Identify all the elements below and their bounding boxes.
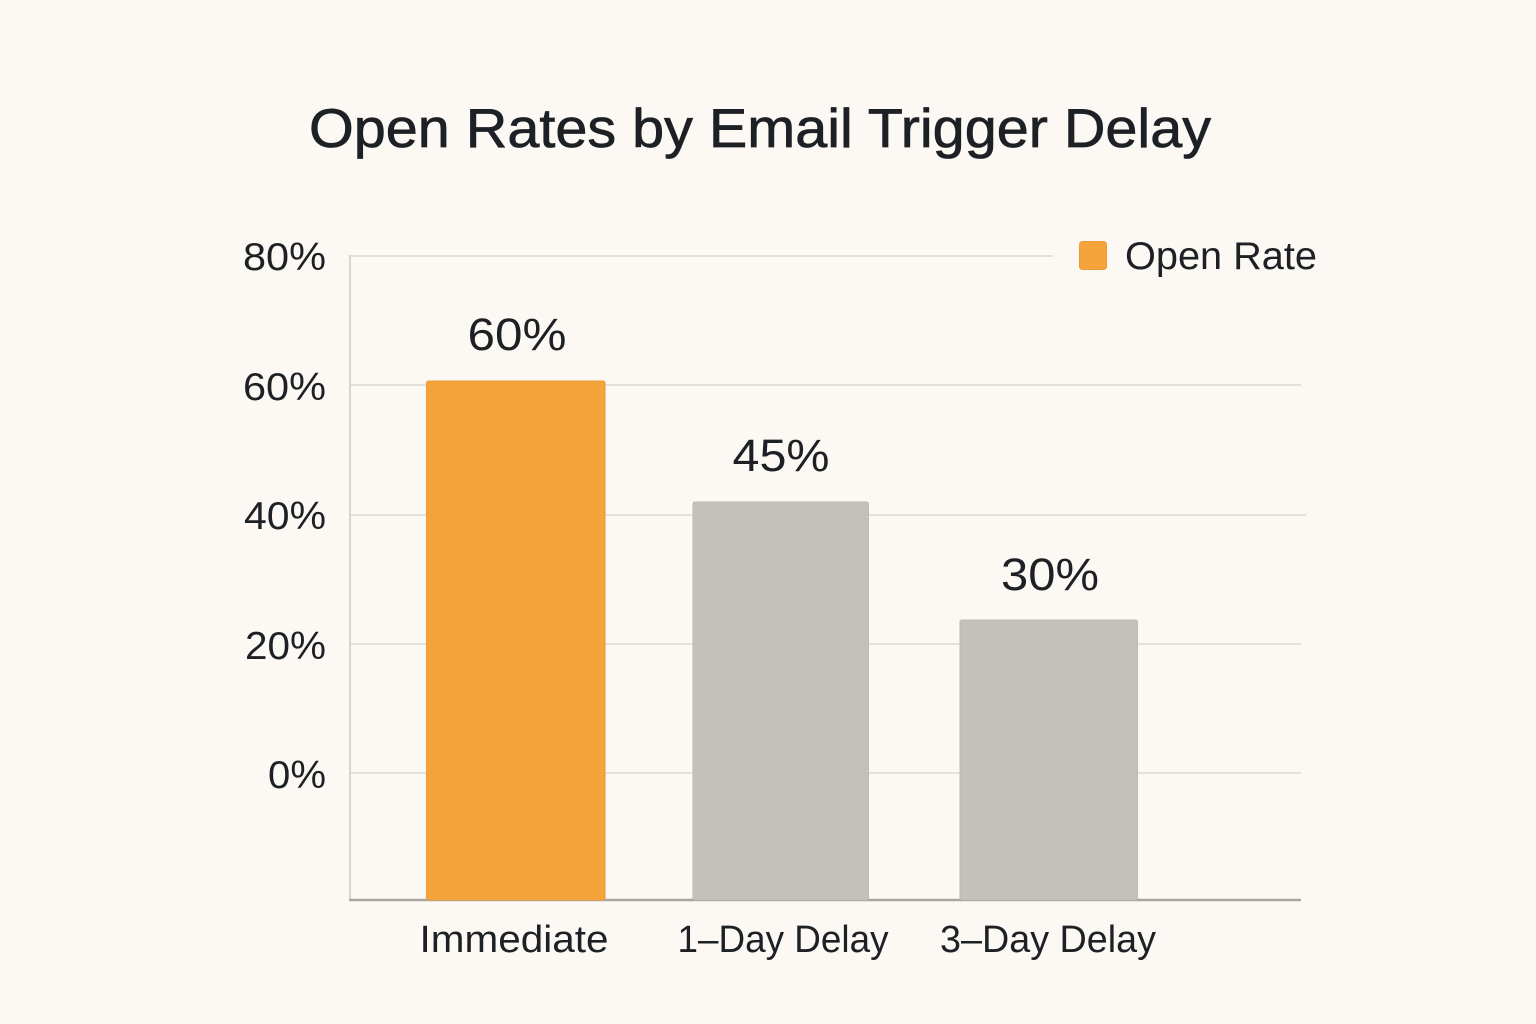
bar: 3-Day Delay 30% <box>960 549 1138 900</box>
legend swatch <box>1080 242 1106 270</box>
bar: Immediate 60% <box>426 309 605 900</box>
x axis labels: 1–Day Delay <box>678 919 888 961</box>
legend <box>1080 235 1317 278</box>
bar: Immediate 60%: 60% <box>468 309 566 360</box>
title: Open Rates by Email Trigger Delay <box>309 97 1212 159</box>
y axis labels <box>243 236 326 797</box>
x axis labels <box>420 919 1156 961</box>
y axis labels: 40% <box>244 495 326 538</box>
y axis labels: 80% <box>243 236 326 279</box>
bar: 3-Day Delay 30%: 30% <box>1001 549 1099 600</box>
y axis labels: 0% <box>268 754 326 797</box>
x axis labels: Immediate <box>420 919 608 961</box>
grid lines and axes <box>349 255 1306 900</box>
y axis labels: 20% <box>245 625 326 668</box>
bar: 1-Day Delay 45% <box>693 430 868 900</box>
y axis labels: 60% <box>243 366 326 409</box>
legend label: Open Rate <box>1125 235 1317 278</box>
x axis labels: 3–Day Delay <box>940 919 1156 961</box>
bar: 1-Day Delay 45%: 45% <box>732 430 830 481</box>
